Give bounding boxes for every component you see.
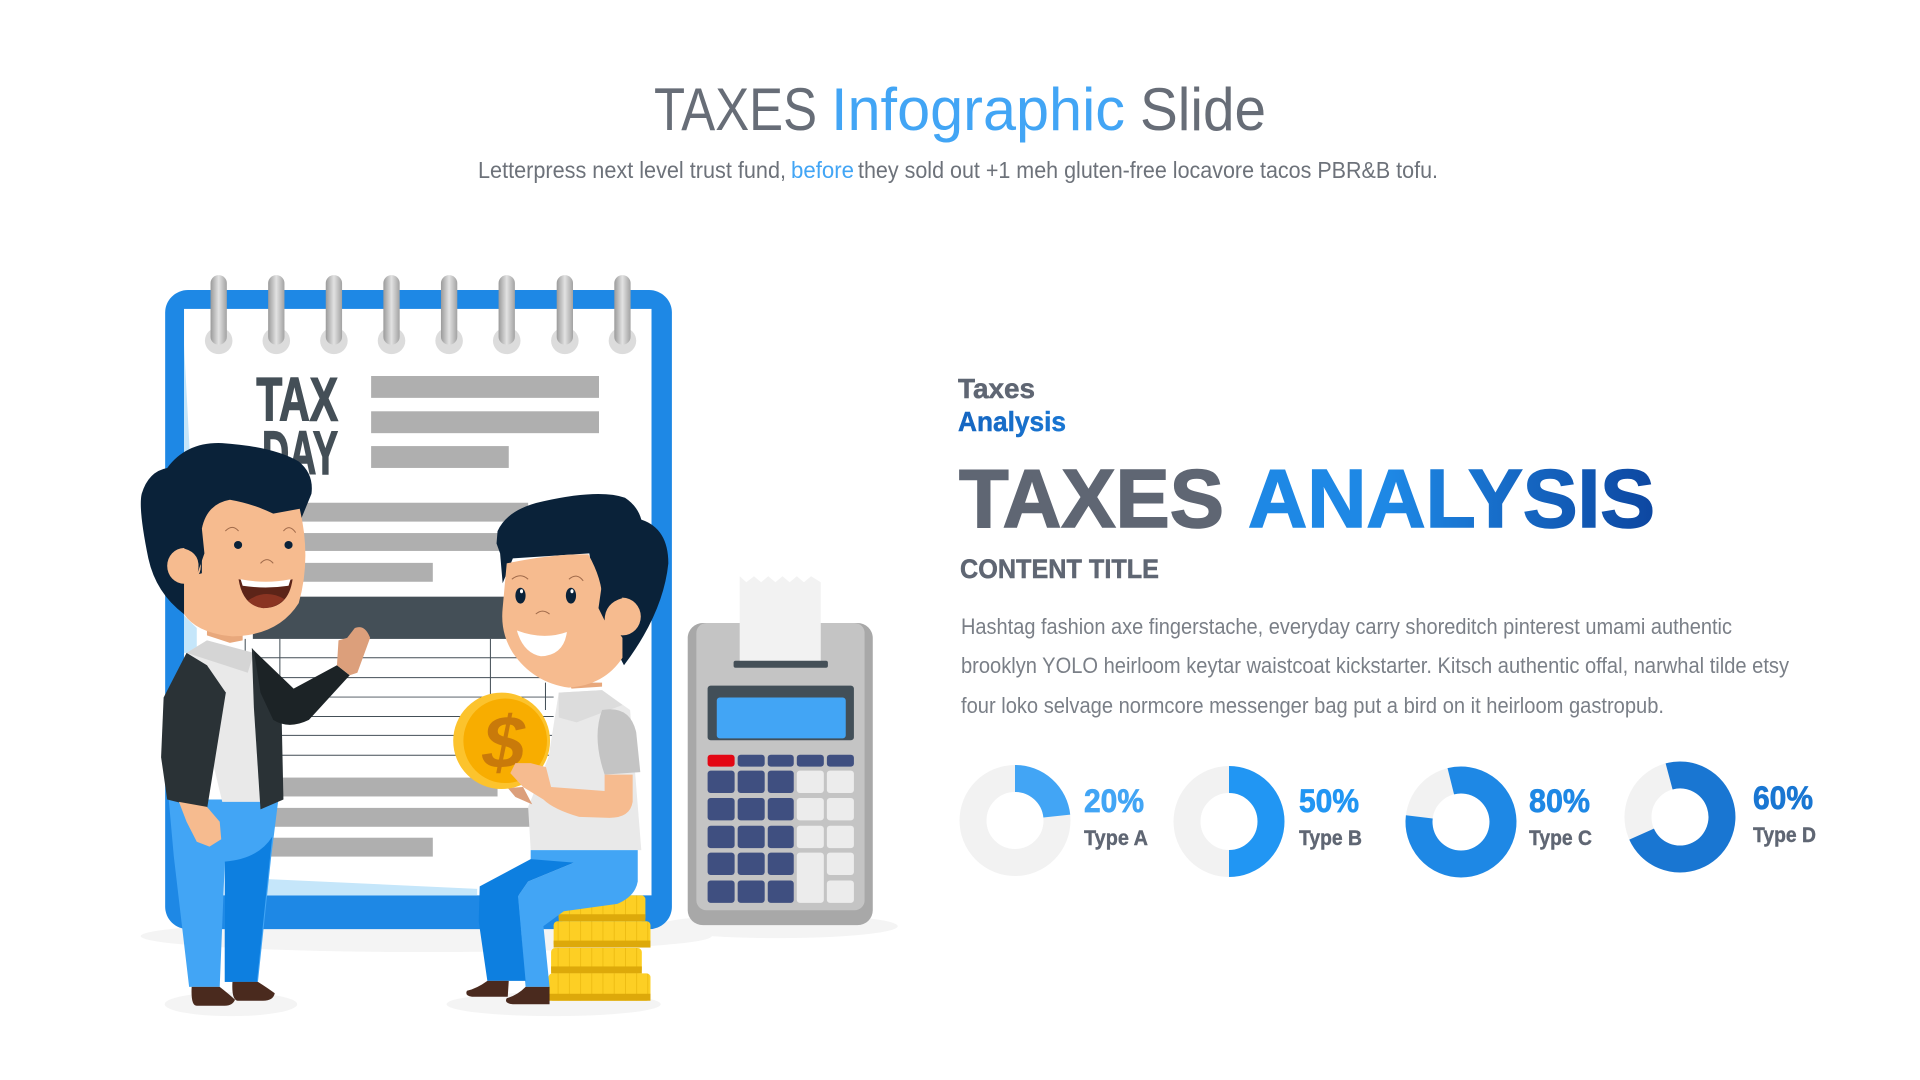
main heading: ANALYSIS [1248, 452, 1655, 545]
body paragraph: brooklyn YOLO heirloom keytar waistcoat kickstarter. Kitsch authentic offal, narwhal tilde etsy [961, 653, 1789, 678]
title: TAXES [654, 76, 817, 143]
donut: type B: Type B [1299, 827, 1362, 850]
gold dollar coin: $ [481, 702, 526, 785]
subtitle: Letterpress next level trust fund, [478, 157, 786, 183]
donut: type C [1419, 780, 1592, 864]
heading stack: Taxes [958, 373, 1035, 404]
form lines [263, 376, 599, 857]
main heading: TAXES [959, 452, 1224, 545]
title: Slide [1140, 76, 1266, 143]
donut: type C: 80% [1529, 783, 1590, 819]
body paragraph: Hashtag fashion axe fingerstache, everyday carry shoreditch pinterest umami authentic [961, 614, 1732, 639]
donut: type A [973, 778, 1148, 862]
notebook rings [205, 275, 636, 354]
tax day label: DAY [262, 419, 338, 488]
heading stack [958, 373, 1066, 437]
main heading [959, 452, 1655, 545]
man right [453, 494, 668, 1004]
content title: CONTENT TITLE [960, 554, 1159, 584]
donut: type B [1187, 780, 1362, 864]
body paragraph [961, 614, 1789, 718]
subtitle: they sold out +1 meh gluten-free locavore tacos PBR&B tofu. [858, 157, 1438, 183]
form table [245, 597, 554, 757]
subtitle: before [791, 157, 854, 183]
donut: type C: Type C [1529, 827, 1592, 850]
illustration: tax day scene [141, 275, 898, 1016]
donut: type A: 20% [1084, 783, 1144, 819]
notebook [165, 275, 672, 929]
ground shadows [141, 914, 898, 1016]
tax day label: TAX [256, 365, 338, 435]
donut: type A: Type A [1084, 827, 1148, 850]
donut: type D: 60% [1753, 780, 1813, 816]
gold dollar coin [453, 693, 550, 789]
coin stack [549, 895, 650, 1001]
title: Infographic [831, 76, 1125, 143]
title [654, 76, 1266, 143]
man left [141, 443, 370, 1006]
subtitle [478, 157, 1438, 183]
donut: type D [1638, 775, 1816, 859]
body paragraph: four loko selvage normcore messenger bag put a bird on it heirloom gastropub. [961, 693, 1664, 718]
heading stack: Analysis [958, 406, 1066, 437]
tax day label [256, 365, 338, 488]
calculator [688, 576, 873, 925]
donut: type B: 50% [1299, 783, 1359, 819]
donut: type D: Type D [1753, 824, 1816, 847]
